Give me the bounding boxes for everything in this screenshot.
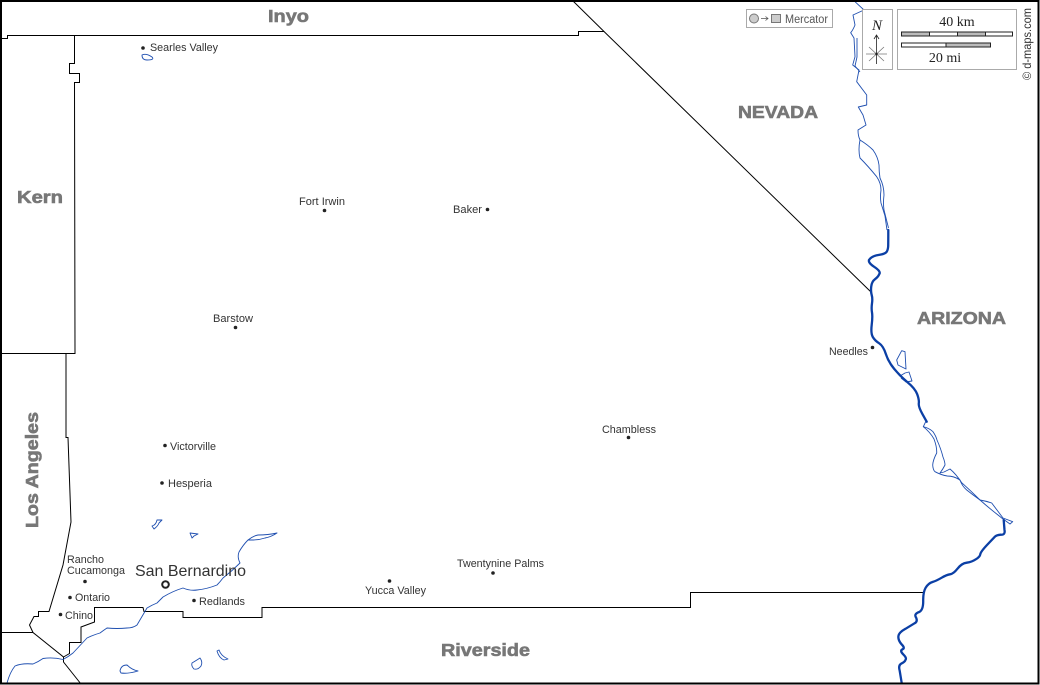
scale bar: 20 mi — [929, 51, 961, 66]
city markers and labels: Chino — [65, 610, 93, 622]
water: minor rivers and lakes — [7, 54, 906, 683]
copyright: © d-maps.com — [1020, 8, 1034, 80]
city markers and labels: Fort Irwin — [299, 196, 345, 208]
projection legend — [746, 10, 832, 28]
city markers and labels: Ontario — [75, 592, 110, 604]
city markers and labels: Yucca Valley — [365, 585, 426, 597]
city markers and labels: Needles — [829, 346, 868, 358]
region labels: Kern — [17, 187, 63, 207]
city markers and labels: Redlands — [199, 596, 245, 608]
scale bar: 40 km — [939, 15, 975, 30]
city markers and labels — [59, 42, 874, 622]
city markers and labels: Searles Valley — [150, 42, 218, 54]
city markers and labels: Chambless — [602, 424, 656, 436]
region labels: Los Angeles — [22, 412, 42, 528]
north arrow — [862, 10, 892, 70]
region labels: ARIZONA — [917, 308, 1006, 328]
city markers and labels: Victorville — [170, 441, 216, 453]
projection legend: Mercator — [785, 14, 828, 26]
city markers and labels: San Bernardino — [135, 563, 246, 580]
city markers and labels: Twentynine Palms — [457, 558, 544, 570]
region labels: Inyo — [268, 6, 309, 26]
Colorado River — [851, 2, 1013, 683]
city markers and labels: Barstow — [213, 313, 253, 325]
north arrow: N — [871, 18, 883, 34]
city markers and labels: Rancho — [67, 554, 104, 566]
scale bar — [898, 10, 1016, 70]
region labels: NEVADA — [738, 102, 818, 122]
city markers and labels: Cucamonga — [67, 565, 126, 577]
city markers and labels: Baker — [453, 204, 482, 216]
region labels: Riverside — [441, 640, 530, 660]
city markers and labels: Hesperia — [168, 478, 213, 490]
